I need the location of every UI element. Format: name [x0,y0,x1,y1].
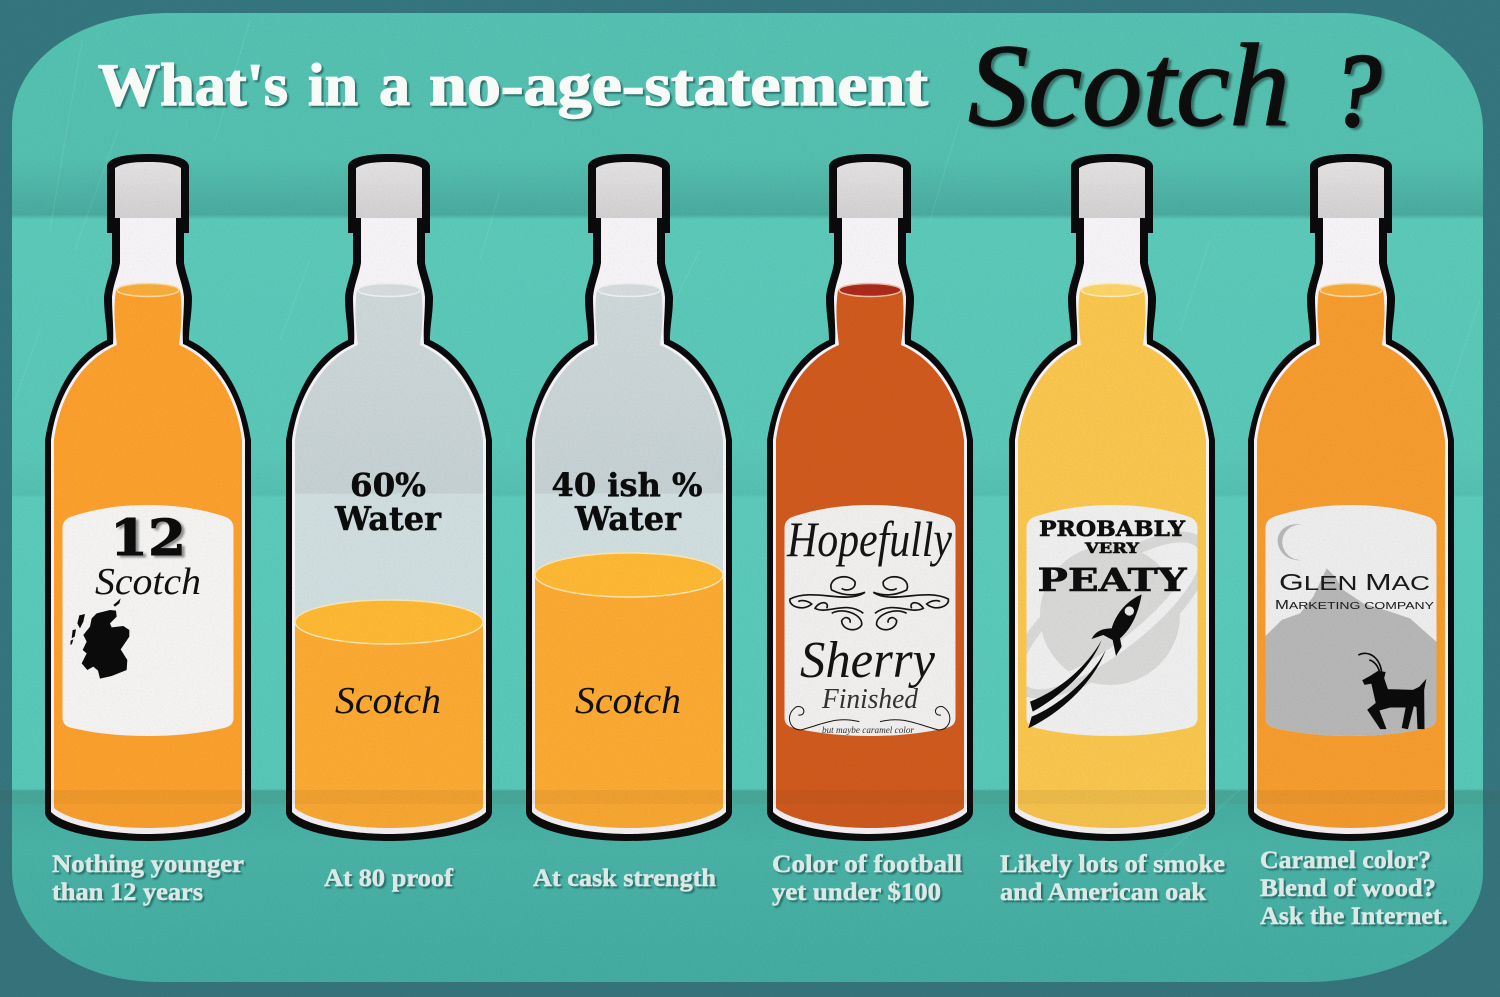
bottle 5: probably very peaty [1009,154,1215,841]
caption: bottle 4: Color of football [772,851,962,878]
icon: ringed planet [1026,532,1198,698]
caption: bottle 3: At cask strength [533,865,716,892]
bottle 4 label text: Hopefully Sherry Finished [786,511,953,735]
caption: bottle 6 [1260,847,1448,930]
title: Scotch ?: Scotch [968,20,1290,151]
fold shading over bottles [0,790,1500,997]
bottle 1 label text: 12 Scotch [95,508,201,603]
bottle 2 text: 60% Water, Scotch: Water [334,499,442,538]
bottle 4 label text: Hopefully Sherry Finished: Hopefully [786,511,953,567]
bottle 3: 40 ish % water [526,154,732,841]
bottle 2 text: 60% Water, Scotch: 60% [350,466,426,504]
bottle 1 label text: 12 Scotch: 12 [110,508,186,567]
title: What's in a no-age-statement: no-age-statement [429,52,928,118]
bottle 1: 12 year Scotch [45,154,251,841]
bottle 3 text: 40 ish % Water, Scotch: 40 ish % [552,466,702,504]
icon: goat [1358,653,1425,728]
bottle 4 label text: Hopefully Sherry Finished: but maybe caramel color [822,725,915,735]
caption: bottle 5: and American oak [1000,879,1206,906]
caption: bottle 6: Caramel color? [1260,847,1431,874]
caption: bottle 1 [52,851,244,906]
caption: bottle 5: Likely lots of smoke [1000,851,1225,878]
title: What's in a no-age-statement: a [379,52,410,118]
title: What's in a no-age-statement: What's [98,52,288,118]
caption: bottle 6: Ask the Internet. [1260,903,1448,930]
bottle 3 text: 40 ish % Water, Scotch: Water [574,499,682,538]
bottle 2 text: 60% Water, Scotch: Scotch [335,680,441,722]
caption: bottle 1: than 12 years [52,879,203,906]
bottle 5 label text: Probably very peaty: VERY [1084,541,1140,557]
caption: bottle 4: yet under $100 [772,879,941,906]
flourish ornaments [789,577,950,730]
bottle 6 label text: Glen Mac Marketing Company: M ARKETING COMPANY [1275,598,1434,612]
title: What's in a no-age-statement: in [308,52,358,118]
caption: bottle 4 [772,851,962,906]
bottle 1 label text: 12 Scotch: Scotch [95,561,201,603]
bottle 4 label text: Hopefully Sherry Finished: Sherry [800,632,936,689]
title: What's in a no-age-statement [98,52,928,118]
bottle 2: 60% water [286,154,492,841]
caption: bottle 2: At 80 proof [324,865,454,892]
caption: bottle 6: Blend of wood? [1260,875,1436,902]
caption: bottle 1: Nothing younger [52,851,244,878]
icon: mountain and crescent moon [1260,524,1440,743]
bottle 5 label text: Probably very peaty: PEATY [1038,561,1188,599]
title: Scotch ?: ? [1332,33,1381,148]
icon: Scotland map silhouette [70,598,129,679]
bottle 5 label text: Probably very peaty [1038,516,1188,599]
bottle 5 label text: Probably very peaty: PROBABLY [1039,516,1186,541]
icon: rocket with smoke trail [1028,594,1142,728]
caption: bottle 5 [1000,851,1225,906]
bottle 3 text: 40 ish % Water, Scotch: Scotch [575,680,681,722]
bottle 6 label text: Glen Mac Marketing Company: G LEN M AC [1279,569,1430,595]
bottle 6: Glen Mac marketing company [1248,154,1454,841]
bottle 4: sherry finished [767,154,973,841]
bottle 6 label text: Glen Mac Marketing Company [1275,569,1434,612]
bottle 2 text: 60% Water, Scotch [334,466,442,722]
bottle 3 text: 40 ish % Water, Scotch [552,466,702,722]
bottle 4 label text: Hopefully Sherry Finished: Finished [821,684,919,715]
